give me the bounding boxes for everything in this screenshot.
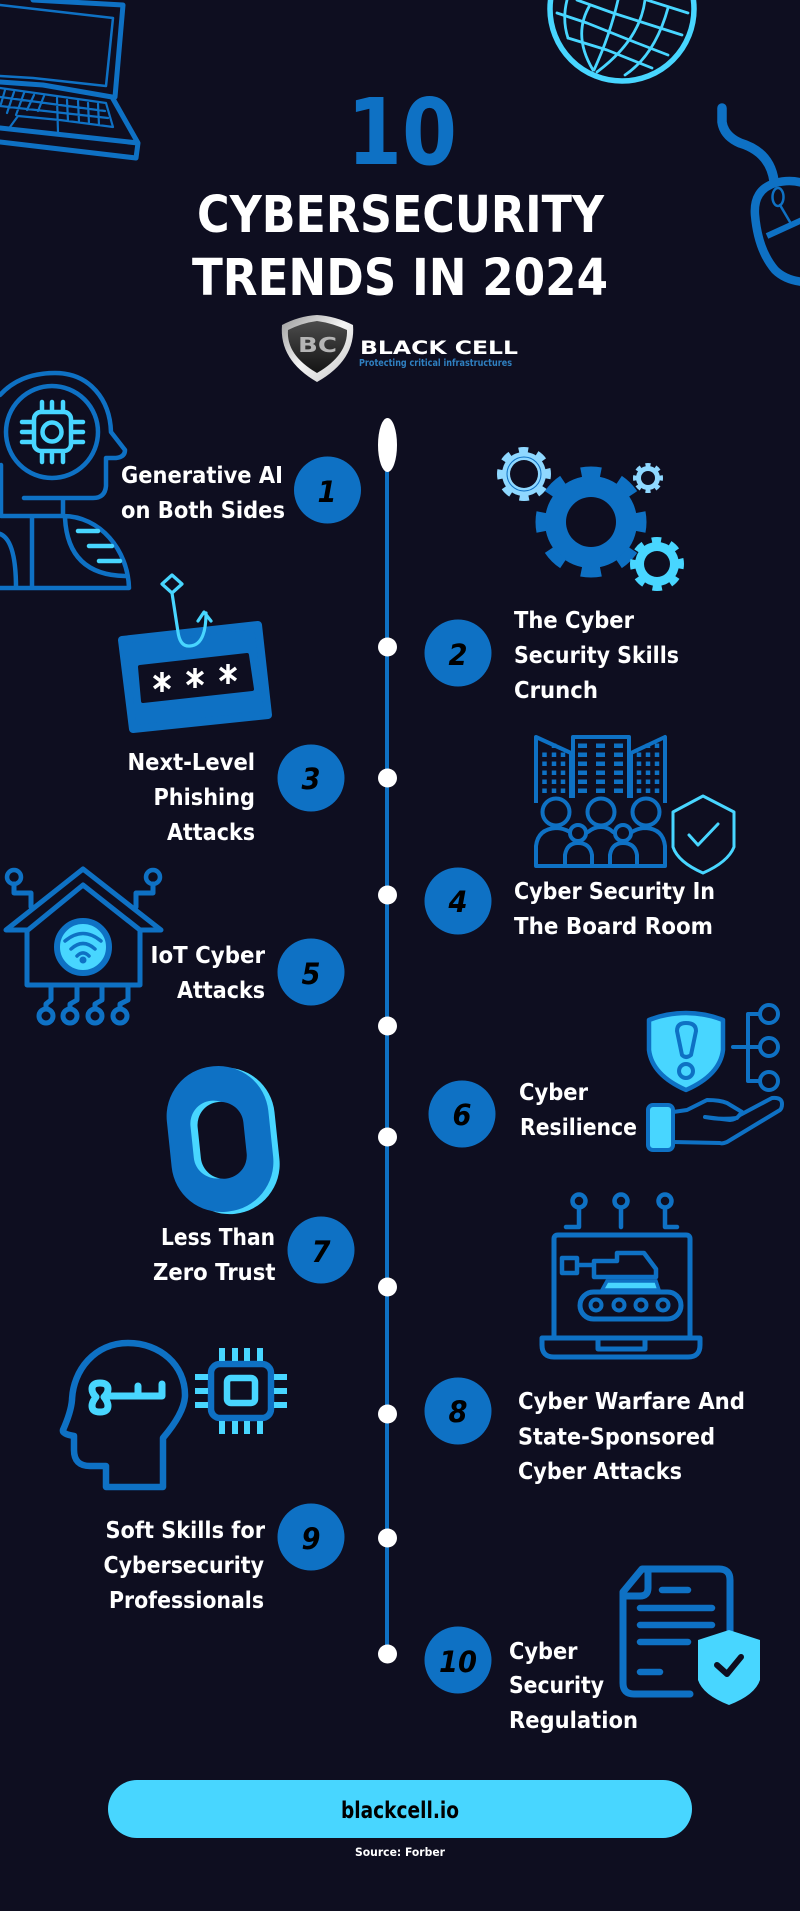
title number: 10	[347, 79, 457, 186]
logo: Black Cell: BLACK CELL	[360, 337, 518, 359]
step 4: Cyber Security In	[514, 879, 715, 905]
step 10: Regulation	[509, 1708, 638, 1734]
step 4: 4	[448, 885, 468, 919]
title: TRENDS IN 2024	[192, 249, 608, 308]
step 5: IoT Cyber	[150, 943, 266, 969]
step 6: Cyber	[519, 1080, 589, 1106]
icon: globe	[550, 0, 694, 81]
icon: zero ring	[162, 1060, 285, 1220]
step 7	[153, 1216, 354, 1286]
step 5: 5	[302, 957, 320, 991]
step 6: Resilience	[520, 1115, 637, 1141]
icon: laptop	[0, 0, 138, 158]
step 7: Less Than	[161, 1225, 275, 1251]
step 2: The Cyber	[514, 608, 635, 634]
step 8: Cyber Warfare And	[518, 1389, 745, 1415]
step 9: Professionals	[109, 1588, 264, 1614]
step 3: Attacks	[167, 820, 255, 846]
step 1: on Both Sides	[121, 498, 285, 524]
logo: Black Cell	[282, 315, 518, 382]
step 2: Crunch	[514, 678, 598, 704]
icon: phishing password card	[122, 575, 268, 729]
title	[192, 186, 608, 308]
icon: resilience shield and hand	[648, 1005, 782, 1150]
step 1: 1	[318, 475, 336, 509]
step 3	[128, 744, 344, 846]
icon: regulation document and shield	[623, 1569, 760, 1705]
step 6	[428, 1080, 637, 1148]
step 8: State-Sponsored	[518, 1424, 715, 1450]
step 3: Phishing	[154, 785, 255, 811]
step 2	[424, 608, 679, 704]
title: CYBERSECURITY	[197, 186, 605, 245]
step 2: Security Skills	[514, 643, 679, 669]
step 8: 8	[448, 1395, 468, 1429]
step 4	[424, 868, 715, 940]
step 3: 3	[302, 762, 320, 796]
logo: Black Cell: Protecting critical infrastructures	[359, 358, 512, 369]
icon: tank on laptop	[542, 1194, 700, 1357]
step 8: Cyber Attacks	[518, 1459, 682, 1485]
timeline spine with markers	[378, 418, 397, 1664]
step 9: 9	[302, 1522, 320, 1556]
step 4: The Board Room	[514, 914, 713, 940]
step 10: 10	[439, 1645, 477, 1679]
step 8	[424, 1378, 745, 1485]
logo: Black Cell: BC	[298, 333, 337, 357]
icon: gears	[500, 450, 681, 588]
source note: Source: Forber	[355, 1845, 445, 1859]
step 6: 6	[452, 1098, 472, 1132]
step 9: Cybersecurity	[104, 1553, 264, 1579]
step 10: Cyber	[509, 1639, 578, 1665]
step 5	[150, 938, 344, 1006]
icon: board room	[536, 737, 734, 873]
step 5: Attacks	[177, 978, 265, 1004]
icon: computer mouse	[722, 108, 800, 282]
step 9: Soft Skills for	[106, 1518, 266, 1544]
step 9	[104, 1504, 344, 1614]
step 10	[424, 1626, 638, 1734]
step 3: Next-Level	[128, 750, 255, 776]
website pill: blackcell.io	[341, 1798, 459, 1824]
step 2: 2	[448, 638, 468, 672]
icon: AI head	[0, 373, 129, 588]
step 10: Security	[509, 1673, 604, 1699]
website pill	[108, 1780, 692, 1838]
step 1	[121, 456, 361, 524]
icon: head with key and chip	[63, 1343, 287, 1487]
step 1: Generative AI	[121, 463, 283, 489]
icon: IoT house	[6, 869, 161, 1023]
step 7: 7	[312, 1235, 331, 1269]
step 7: Zero Trust	[153, 1260, 276, 1286]
